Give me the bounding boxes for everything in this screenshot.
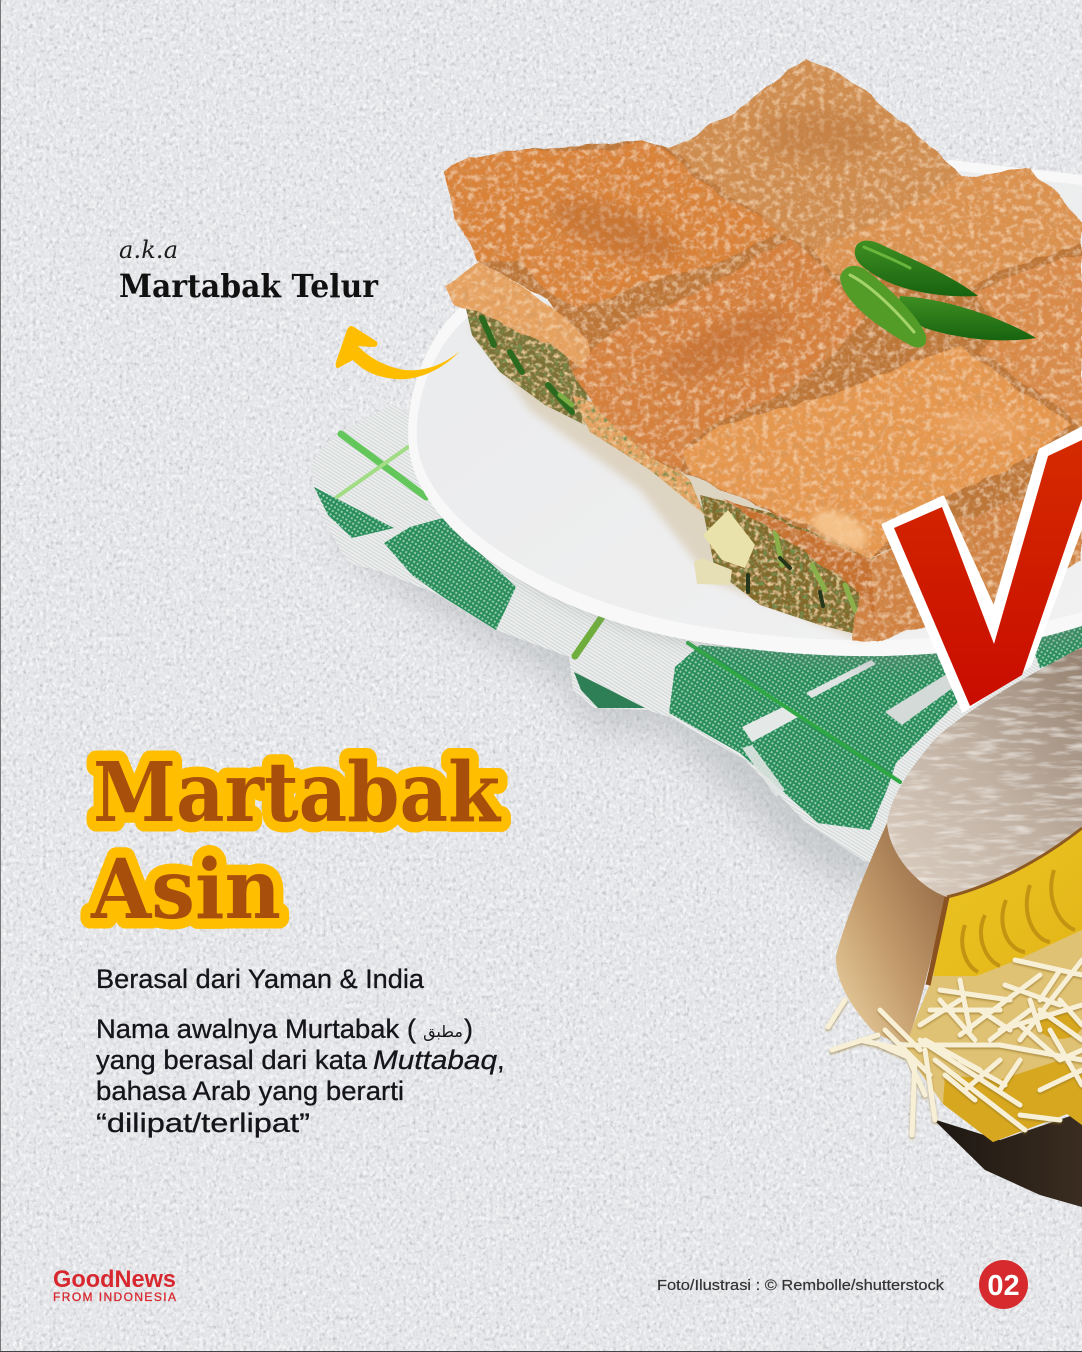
logo: GoodNews from Indonesia: FROM INDONESIA — [53, 1290, 176, 1304]
cake top rim — [947, 828, 1082, 897]
green checked cloth — [312, 403, 1082, 870]
crust highlights — [541, 109, 1022, 557]
piece: right — [975, 255, 1082, 430]
green filling strip — [575, 245, 758, 332]
origin text: Berasal dari Yaman & India — [96, 964, 425, 994]
name history text: bahasa Arab yang berarti — [96, 1076, 404, 1106]
green chilies — [840, 241, 1036, 348]
cake honeycomb ridges — [962, 870, 1075, 972]
name history text: ) — [464, 1014, 473, 1044]
martabak manis cake — [828, 647, 1082, 1207]
cloth green checks — [314, 487, 1082, 830]
alternate name: Martabak Telur — [119, 267, 379, 305]
cabbage chunks — [694, 510, 755, 585]
plate rim — [408, 160, 1082, 656]
piece: lower right — [850, 480, 1082, 640]
name history text: Nama awalnya Murtabak ( — [96, 1014, 416, 1044]
name history text — [96, 1014, 505, 1138]
yellow crumbs lower — [943, 1011, 1082, 1142]
title: Martabak Asin — [90, 745, 502, 938]
a.k.a label: a.k.a — [119, 236, 178, 264]
cloth bright stripes — [337, 434, 900, 782]
name history text: yang berasal dari kata — [96, 1045, 368, 1075]
a.k.a label — [119, 236, 379, 305]
logo: GoodNews from Indonesia: GoodNews — [53, 1266, 176, 1293]
egg filling bottom — [700, 495, 880, 640]
name history text: مطبق — [423, 1022, 463, 1042]
name history text: “dilipat/terlipat” — [96, 1108, 310, 1138]
pale layer under middle piece — [572, 395, 705, 515]
plate well — [417, 170, 1082, 640]
yellow cut surface — [933, 828, 1082, 976]
piece: left edge underside — [446, 262, 590, 372]
white plate — [408, 160, 1082, 668]
piece: front — [682, 345, 1072, 558]
curved arrow — [336, 326, 460, 379]
name history text: Muttabaq — [373, 1045, 497, 1075]
piece: back — [670, 57, 962, 255]
shredded cheese — [828, 960, 1082, 1135]
title: Martabak Asin: Martabak — [93, 745, 502, 841]
cake top surface — [887, 647, 1082, 897]
page number badge: 02 — [987, 1270, 1020, 1302]
title: Martabak Asin: Asin — [90, 842, 281, 938]
martabak telur — [442, 57, 1082, 640]
piece: middle — [572, 240, 865, 468]
cloth shadow — [330, 500, 900, 900]
cake lower crumb — [905, 930, 1082, 1142]
photo credit: Foto/Ilustrasi : © Rembolle/shutterstock — [657, 1277, 945, 1294]
crust underlay — [470, 57, 1082, 558]
red letter V — [883, 428, 1082, 711]
piece: top right — [815, 168, 1082, 295]
cake crust side — [836, 823, 947, 1042]
crust pieces — [442, 57, 1082, 640]
piece: top left — [442, 140, 782, 310]
banana leaf base — [933, 1112, 1082, 1207]
page number badge — [979, 1260, 1028, 1309]
filling green bits — [482, 318, 855, 610]
egg filling left — [464, 300, 590, 425]
plate food shadow — [470, 300, 960, 640]
plate shadow — [430, 480, 1082, 668]
name history text: , — [497, 1045, 505, 1075]
